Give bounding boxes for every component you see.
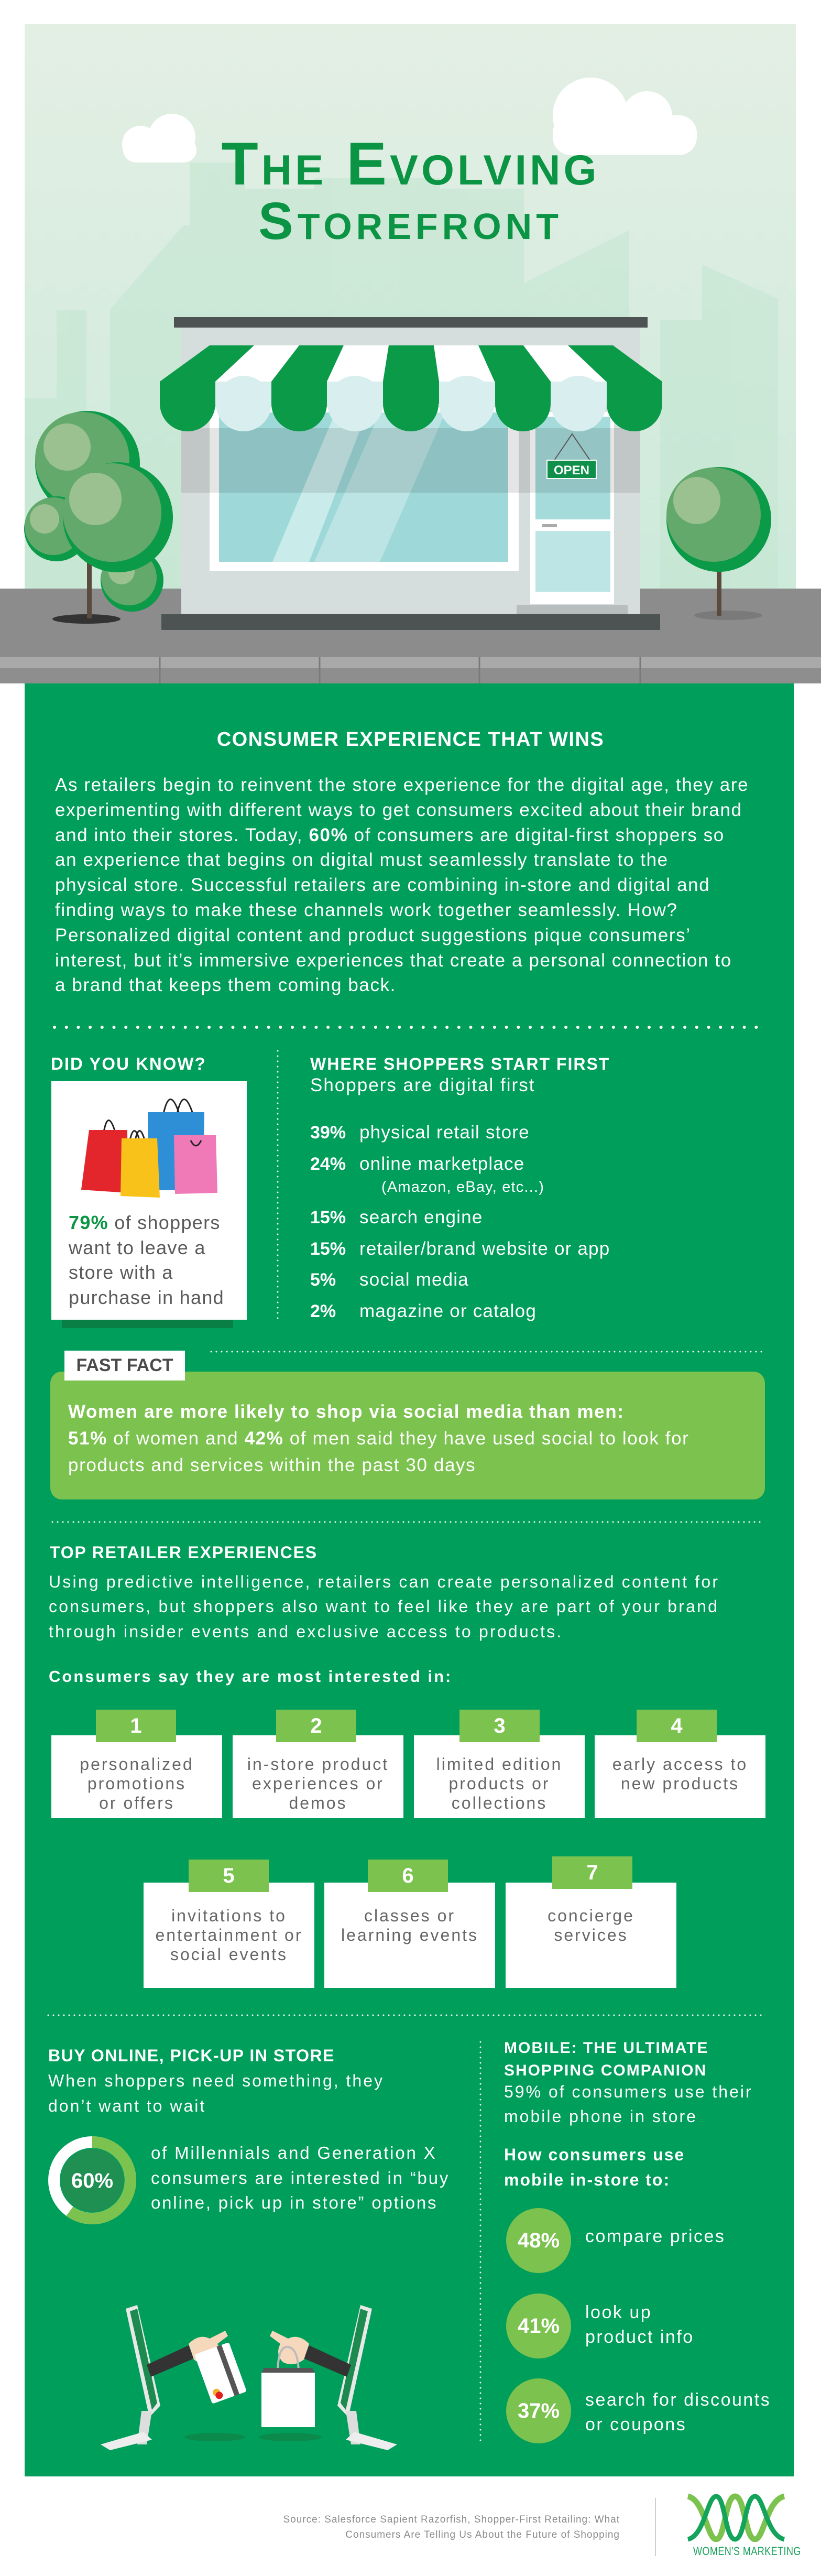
- source text: [283, 2514, 620, 2540]
- stat circle 41%: [506, 2294, 571, 2358]
- awning: [160, 345, 662, 431]
- heading: WHERE SHOPPERS START FIRST: [310, 1055, 610, 1073]
- number tab 3: [459, 1710, 540, 1742]
- heading: buy online pick-up in store: BUY ONLINE, PICK-UP IN STORE: [48, 2046, 335, 2065]
- intro paragraph: As retailers begin to reinvent the store experience for the digital age, they are: [55, 775, 749, 795]
- intro paragraph: finding ways to make these channels work together seamlessly. How?: [55, 900, 678, 920]
- OPEN sign: [547, 434, 596, 479]
- list: 2%: [310, 1301, 336, 1321]
- label search for discounts: [585, 2390, 771, 2434]
- stat text: millennials: of Millennials and Generation X: [151, 2143, 436, 2162]
- number tab 6: [368, 1860, 448, 1892]
- number tab 2: 2: [310, 1714, 322, 1737]
- list: 24%: [310, 1154, 346, 1174]
- list: online marketplace: [359, 1154, 524, 1174]
- number tab 1: 1: [130, 1714, 142, 1737]
- number tab 7: 7: [586, 1861, 598, 1884]
- number tab 2: [276, 1710, 356, 1742]
- card 5: [144, 1883, 314, 1988]
- source text: Consumers Are Telling Us About the Future of Shopping: [345, 2529, 620, 2540]
- number tab 1: [96, 1710, 176, 1742]
- card 2: experiences or: [252, 1774, 384, 1793]
- logo: women's marketing: WOMEN'S MARKETING: [693, 2545, 801, 2558]
- stat circle 37%: [506, 2378, 571, 2443]
- list: search engine: [359, 1207, 483, 1227]
- fast fact text: products and services within the past 30 days: [68, 1455, 476, 1475]
- list: [310, 1122, 610, 1321]
- card 3: collections: [452, 1794, 547, 1812]
- heading: top retailer experiences: TOP RETAILER EXPERIENCES: [50, 1543, 318, 1562]
- intro paragraph: and into their stores. Today, 60% of consumers are digital-first shoppers so: [55, 825, 725, 845]
- intro paragraph: Personalized digital content and product suggestions pique consumers’: [55, 925, 691, 945]
- heading: did you know: DID YOU KNOW?: [51, 1054, 206, 1073]
- stat circle 37%: 37%: [518, 2399, 560, 2422]
- fast fact text: 51% of women and 42% of men said they have used social to look for: [68, 1428, 689, 1449]
- subheading: consumers say: Consumers say they are most interested in:: [49, 1667, 452, 1686]
- heading: mobile: [504, 2039, 709, 2079]
- label compare prices: compare prices: [585, 2226, 725, 2246]
- list: 15%: [310, 1239, 346, 1259]
- stat text: 79%: store with a: [69, 1262, 173, 1283]
- intro paragraph: a brand that keeps them coming back.: [55, 975, 396, 995]
- stat circle 41%: 41%: [518, 2314, 560, 2338]
- fast fact label: [64, 1351, 185, 1381]
- fast fact text: Women are more likely to shop via social media than men:: [68, 1401, 624, 1422]
- donut chart: 60%: 60%: [71, 2169, 113, 2192]
- card 3: [414, 1735, 585, 1818]
- list: physical retail store: [359, 1122, 530, 1143]
- label look up product info: product info: [585, 2327, 694, 2347]
- intro paragraph: interest, but it’s immersive experiences that create a personal connection to: [55, 950, 732, 971]
- illustration: online to store hands: [101, 2305, 397, 2450]
- subtext: bopis: don’t want to wait: [48, 2096, 206, 2115]
- list: 39%: [310, 1123, 346, 1143]
- list: 5%: [310, 1270, 336, 1290]
- card 1: [51, 1735, 222, 1818]
- paragraph: top retailer: consumers, but shoppers also want to feel like they are part of your brand: [49, 1597, 719, 1616]
- intro paragraph: experimenting with different ways to get consumers excited about their brand: [55, 800, 742, 820]
- logo: women's marketing: [687, 2494, 801, 2558]
- list: 15%: [310, 1208, 346, 1227]
- footer divider: [655, 2498, 656, 2556]
- subheading: Shoppers are digital first: [310, 1075, 535, 1095]
- number tab 7: [552, 1856, 632, 1889]
- OPEN sign: OPEN: [554, 463, 589, 477]
- paragraph: top retailer: through insider events and exclusive access to products.: [49, 1622, 563, 1641]
- intro paragraph: physical store. Successful retailers are combining in-store and digital and: [55, 875, 710, 895]
- card 4: [595, 1735, 765, 1818]
- store building: [161, 317, 660, 630]
- card 6: [324, 1883, 495, 1988]
- subheading: how consumers use mobile: [504, 2145, 685, 2189]
- subtext: bopis: [48, 2071, 384, 2115]
- title: Storefront: [258, 192, 563, 251]
- subheading: how consumers use mobile: mobile in-store to:: [504, 2170, 670, 2189]
- card 2: demos: [289, 1794, 347, 1812]
- source text: Source: Salesforce Sapient Razorfish, Shopper-First Retailing: What: [283, 2514, 620, 2525]
- subtext: bopis: When shoppers need something, they: [48, 2071, 384, 2090]
- subtext: 59% use mobile: [504, 2082, 753, 2126]
- donut chart: 60%: [48, 2136, 136, 2224]
- list: social media: [359, 1269, 469, 1290]
- card 2: [233, 1735, 403, 1818]
- card 7: services: [554, 1926, 628, 1944]
- label search for discounts: search for discounts: [585, 2390, 771, 2410]
- tree left: [24, 411, 173, 624]
- number tab 4: 4: [671, 1714, 683, 1737]
- intro paragraph: an experience that begins on digital must seamlessly translate to the: [55, 850, 669, 870]
- fast fact label: FAST FACT: [76, 1355, 173, 1375]
- card 1: promotions: [87, 1774, 186, 1793]
- fast fact box: [50, 1372, 765, 1499]
- stat text: millennials: online, pick up in store” options: [151, 2193, 437, 2212]
- subtext: 59% use mobile: mobile phone in store: [504, 2107, 697, 2126]
- stat text: millennials: consumers are interested in “buy: [151, 2168, 450, 2188]
- card 3: products or: [448, 1774, 550, 1793]
- number tab 3: 3: [494, 1714, 506, 1737]
- card 6: classes or: [364, 1906, 455, 1925]
- stat text: 79%: purchase in hand: [69, 1286, 224, 1308]
- card 4: early access to: [612, 1755, 748, 1774]
- main green panel: [25, 683, 794, 2476]
- number tab 5: 5: [223, 1864, 235, 1887]
- stat circle 48%: 48%: [518, 2229, 560, 2252]
- intro paragraph: [55, 775, 749, 995]
- number tab 4: [637, 1710, 717, 1742]
- heading: mobile: MOBILE: THE ULTIMATE: [504, 2039, 709, 2057]
- card 7: [506, 1883, 676, 1988]
- heading: mobile: SHOPPING COMPANION: [504, 2062, 707, 2079]
- card 5: entertainment or: [155, 1926, 303, 1944]
- subheading: how consumers use mobile: How consumers use: [504, 2145, 685, 2164]
- subtext: 59% use mobile: 59% of consumers use their: [504, 2082, 753, 2101]
- card 5: social events: [170, 1945, 288, 1964]
- card 4: new products: [621, 1774, 739, 1793]
- card 6: learning events: [341, 1926, 478, 1944]
- skyline buildings: [25, 162, 778, 593]
- list: (Amazon, eBay, etc...): [381, 1179, 544, 1195]
- tree right: [666, 467, 771, 620]
- title: [222, 131, 599, 251]
- stat text: 79%: 79% of shoppers: [69, 1212, 221, 1233]
- paragraph: top retailer: [49, 1572, 719, 1641]
- list: retailer/brand website or app: [359, 1238, 610, 1259]
- card 3: limited edition: [436, 1755, 562, 1774]
- label look up product info: [585, 2302, 694, 2347]
- paragraph: top retailer: Using predictive intelligence, retailers can create personalized content for: [49, 1572, 719, 1591]
- card 7: concierge: [548, 1906, 634, 1925]
- label look up product info: look up: [585, 2302, 652, 2322]
- stat text: 79%: want to leave a: [69, 1237, 206, 1258]
- card 5: invitations to: [171, 1906, 287, 1925]
- section: where shoppers start first: [310, 1055, 610, 1321]
- header illustration: storefront scene: [0, 24, 821, 683]
- icon: shopping bags: [81, 1099, 217, 1198]
- stat circle 48%: [506, 2208, 571, 2273]
- title: The Evolving: [222, 131, 599, 198]
- sky background: [25, 24, 796, 590]
- clouds: [122, 78, 697, 162]
- sidewalk: [0, 589, 821, 657]
- number tab 6: 6: [402, 1864, 414, 1887]
- label search for discounts: or coupons: [585, 2415, 686, 2434]
- card 1: or offers: [99, 1794, 174, 1812]
- stat text: 79%: [69, 1212, 224, 1308]
- stat text: millennials: [151, 2143, 450, 2212]
- number tab 5: [189, 1860, 269, 1892]
- list: magazine or catalog: [359, 1301, 537, 1321]
- card 1: personalized: [80, 1755, 194, 1774]
- fast fact text: [68, 1401, 689, 1475]
- card 2: in-store product: [247, 1755, 389, 1774]
- panel: did you know card: [51, 1081, 247, 1328]
- heading: consumer experience that wins: CONSUMER EXPERIENCE THAT WINS: [217, 729, 604, 751]
